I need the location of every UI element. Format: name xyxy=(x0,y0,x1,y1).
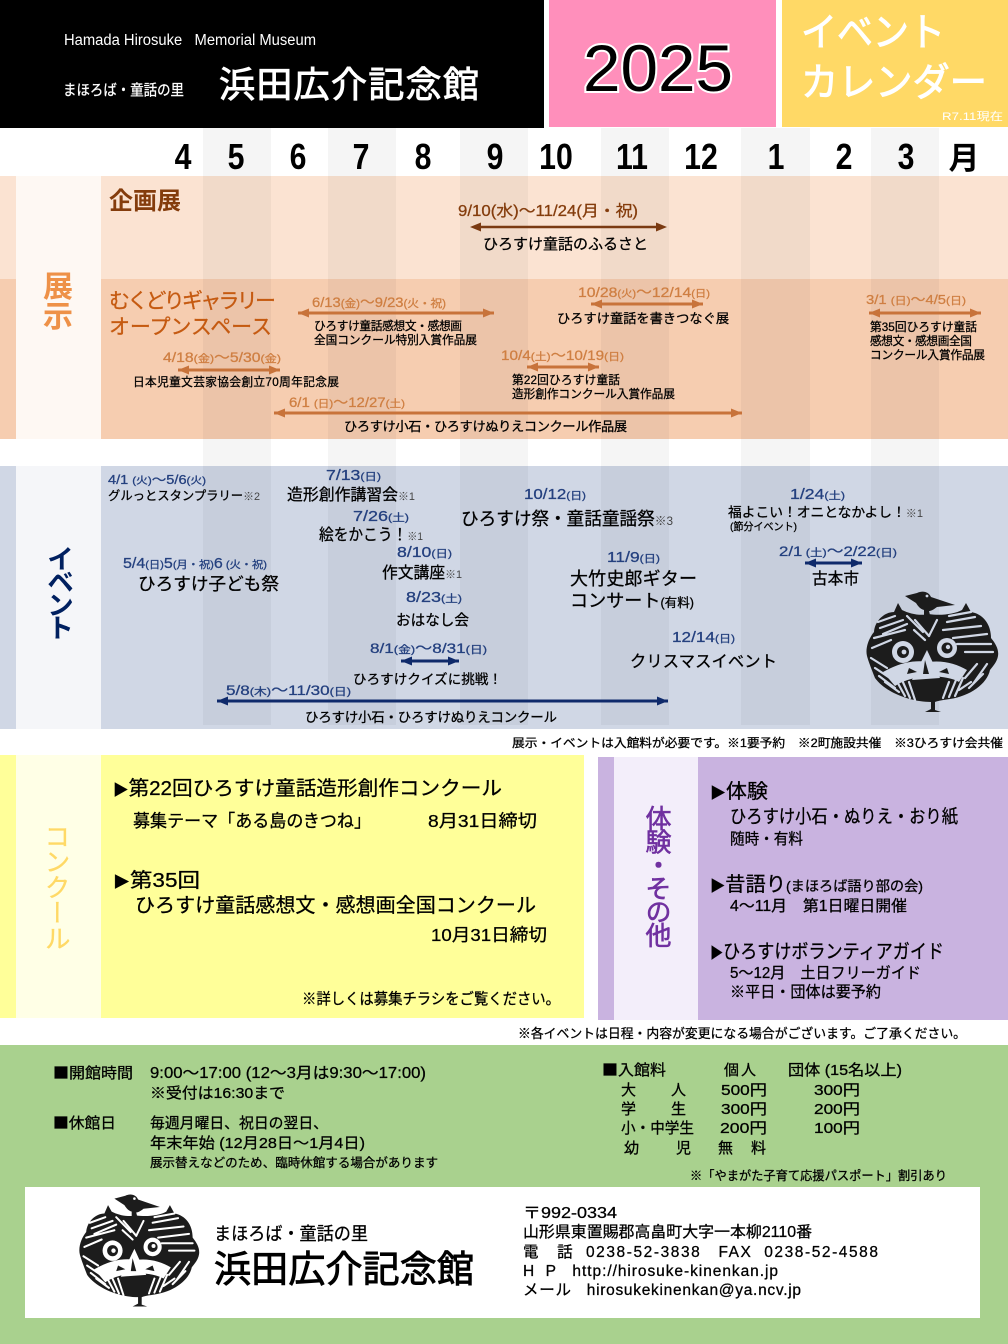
event: pebble contest: 5/8 (木) ～11/30 (日) xyxy=(226,682,351,698)
event: gallery 10/28: ひろすけ童話を書きつなぐ展 xyxy=(557,311,729,326)
header: year xyxy=(549,0,776,127)
event: stamp rally xyxy=(108,473,260,503)
admission table: 料 xyxy=(751,1140,766,1157)
event: gallery 10/4: 第22回ひろすけ童話 xyxy=(512,373,620,387)
event: gallery 6/13: ひろすけ童話感想文・感想画 xyxy=(314,319,462,333)
event: stamp rally: グルっとスタンプラリー※2 xyxy=(108,489,260,503)
event: drawing xyxy=(319,508,423,544)
event: gallery 10/4: 造形創作コンクール入賞作品展 xyxy=(512,387,675,401)
event: drawing: 絵をかこう！※1 xyxy=(319,526,423,544)
heading: gallery: むくどりギャラリー xyxy=(109,290,276,313)
month header row: 12 xyxy=(684,138,718,178)
event: guitar concert: 大竹史郎ギター xyxy=(570,569,697,589)
event: guitar concert xyxy=(570,549,697,611)
month header row: 11 xyxy=(616,138,648,178)
event: gallery 10/4 xyxy=(501,348,675,401)
event: guitar concert: 11/9 (日) xyxy=(607,549,660,566)
admission table: ■入館料 xyxy=(602,1059,666,1080)
event: special exhibition: ひろすけ童話のふるさと xyxy=(483,236,648,253)
panel: visitor information xyxy=(0,1045,1008,1344)
admission table: 500円 xyxy=(721,1082,767,1099)
admission table: 児 xyxy=(676,1140,691,1157)
event: composition: 作文講座※1 xyxy=(382,564,462,582)
event: quiz xyxy=(353,640,502,687)
panel: experience and others: ▶昔語り(まほろば語り部の会) xyxy=(710,873,923,896)
event: book market: 2/1 (土) ～2/22 (日) xyxy=(779,543,897,559)
panel: experience and others: ひろすけ小石・ぬりえ・おり紙 xyxy=(730,806,958,827)
event: setsubun: 1/24 (土) xyxy=(790,486,845,503)
heading: gallery xyxy=(109,290,276,339)
opening hours: ■開館時間 xyxy=(53,1062,133,1083)
opening hours: 9:00～17:00 (12～3月は9:30～17:00) xyxy=(150,1065,426,1082)
opening hours xyxy=(53,1062,426,1102)
event: children's festival: 5/4(日)5(月・祝)6 (火・祝) xyxy=(123,555,267,572)
event: gallery 4/18: 4/18 (金)～5/30 (金) xyxy=(163,350,281,365)
event: special exhibition: 9/10(水)～11/24(月・祝) xyxy=(458,202,638,220)
event: gallery 10/4: 10/4 (土)～10/19 (日) xyxy=(501,348,624,363)
panel: contests: ※詳しくは募集チラシをご覧ください。 xyxy=(302,991,560,1008)
event: christmas: クリスマスイベント xyxy=(630,653,777,671)
header: museum name: Hamada Hirosuke Memorial Museum xyxy=(64,32,316,49)
event: book market: 古本市 xyxy=(812,570,859,588)
month header row: 9 xyxy=(487,138,503,178)
panel: contests: 10月31日締切 xyxy=(431,925,547,945)
event: children's festival xyxy=(123,555,279,594)
month header row: 2 xyxy=(836,138,852,178)
panel: contact card: 山形県東置賜郡高畠町大字一本柳2110番 xyxy=(523,1223,812,1241)
event: gallery 3/1: コンクール入賞作品展 xyxy=(870,349,985,362)
header: museum name: 浜田広介記念館 xyxy=(219,64,479,105)
event: quiz: ひろすけクイズに挑戦！ xyxy=(353,672,502,687)
event: craft workshop: 造形創作講習会※1 xyxy=(287,486,415,504)
header: event calendar title: R7.11現在 xyxy=(942,110,1003,123)
panel: contests: 8月31日締切 xyxy=(428,811,537,831)
admission table: 100円 xyxy=(814,1120,860,1137)
event: guitar concert: コンサート(有料) xyxy=(570,591,694,611)
month header row: 7 xyxy=(353,138,369,178)
event: gallery 6/13 xyxy=(298,294,494,347)
admission table: 300円 xyxy=(721,1101,767,1118)
event: gallery 3/1: 感想文・感想画全国 xyxy=(870,334,972,348)
header: event calendar title: カレンダー xyxy=(801,62,987,105)
event: gallery 6/13: 6/13(金)～9/23(火・祝) xyxy=(312,294,446,310)
heading: exhibitions: 展 xyxy=(43,271,73,304)
month header row: 3 xyxy=(898,138,914,178)
event: setsubun: (節分イベント) xyxy=(730,520,797,533)
admission table: 学 xyxy=(621,1101,636,1118)
admission table: 200円 xyxy=(814,1101,860,1118)
panel: contests: コンクール xyxy=(41,823,71,951)
panel: contact card: 浜田広介記念館 xyxy=(214,1249,474,1290)
footnote: admission note: 展示・イベントは入館料が必要です。※1要予約 ※2町施設共催 ※3ひろすけ会共催 xyxy=(512,735,1003,750)
header: event calendar title xyxy=(782,0,1008,127)
month header row: 4 xyxy=(175,138,192,178)
event: quiz: 8/1 (金) ～8/31 (日) xyxy=(370,640,487,656)
panel: contests xyxy=(0,755,584,1018)
month header row: 10 xyxy=(539,138,573,178)
panel: experience and others: ▶ひろすけボランティアガイド xyxy=(710,941,944,963)
panel: experience and others: ※平日・団体は要予約 xyxy=(730,983,881,1001)
month header row xyxy=(175,138,980,178)
panel: experience and others xyxy=(598,757,1008,1020)
event: hirosuke festival xyxy=(461,486,673,529)
event: hirosuke festival: ひろすけ祭・童話童謡祭※3 xyxy=(461,509,673,529)
heading: events: イベント xyxy=(43,545,73,641)
month header row: 6 xyxy=(290,138,306,178)
panel: exhibitions xyxy=(0,176,1008,439)
opening hours: ※受付は16:30まで xyxy=(150,1085,285,1102)
panel: experience and others: 随時・有料 xyxy=(730,830,803,848)
event: gallery 3/1: 3/1 (日)～4/5 (日) xyxy=(866,292,966,307)
admission table: 幼 xyxy=(624,1140,639,1157)
month header row: 月 xyxy=(948,141,980,176)
event: hirosuke festival: 10/12 (日) xyxy=(524,486,586,503)
event: craft workshop: 7/13 (日) xyxy=(326,467,381,484)
panel: events xyxy=(0,466,1008,729)
panel: contact card: メール hirosukekinenkan@ya.ncv.jp xyxy=(523,1282,801,1299)
admission table: 生 xyxy=(671,1101,686,1118)
event: stamp rally: 4/1 (火)～5/6 (火) xyxy=(108,473,206,487)
event: gallery 10/28: 10/28 (火)～12/14 (日) xyxy=(578,284,710,300)
event: gallery 3/1: 第35回ひろすけ童話 xyxy=(870,320,977,334)
panel: contact card: 電 話 0238-52-3838 FAX 0238-52-4588 xyxy=(523,1243,878,1261)
event: storytelling: 8/23 (土) xyxy=(406,589,462,606)
panel: contests: ▶第35回 xyxy=(113,869,200,892)
panel: experience and others: 4～11月 第1日曜日開催 xyxy=(730,897,907,915)
panel: experience and others: 5～12月 土日フリーガイド xyxy=(730,964,921,982)
panel: contact card xyxy=(25,1187,980,1318)
admission table: 200円 xyxy=(720,1120,767,1137)
month header row: 1 xyxy=(768,138,784,178)
event: pebble contest xyxy=(217,682,668,725)
event: pebble contest: ひろすけ小石・ひろすけぬりえコンクール xyxy=(305,710,557,725)
panel: contact card: H P http://hirosuke-kinenkan.jp xyxy=(523,1263,778,1280)
footnote: schedule change note: ※各イベントは日程・内容が変更になる場合がございます。ご了承ください。 xyxy=(518,1026,966,1041)
panel: experience and others: ▶体験 xyxy=(710,780,768,803)
event: setsubun xyxy=(728,486,923,533)
panel: contests: ▶第22回ひろすけ童話造形創作コンクール xyxy=(113,777,502,800)
header: year: 2025 xyxy=(583,31,733,105)
header: event calendar title: イベント xyxy=(801,12,945,55)
event: gallery 4/18: 日本児童文芸家協会創立70周年記念展 xyxy=(133,375,339,389)
heading: gallery: オープンスペース xyxy=(109,316,272,339)
closed days: ■休館日 xyxy=(53,1112,116,1133)
icon: owl logo xyxy=(79,1194,199,1306)
panel: contact card: 〒992-0334 xyxy=(523,1205,617,1222)
closed days: 毎週月曜日、祝日の翌日、 xyxy=(150,1115,328,1132)
event: storytelling: おはなし会 xyxy=(396,612,469,629)
event: gallery 6/1: 6/1 (日)～12/27 (土) xyxy=(289,395,405,410)
event: gallery 6/1: ひろすけ小石・ひろすけぬりえコンクール作品展 xyxy=(344,419,627,434)
event: children's festival: ひろすけ子ども祭 xyxy=(138,574,279,594)
month header row: 8 xyxy=(415,138,431,178)
closed days xyxy=(53,1112,438,1170)
panel: contests: 募集テーマ「ある島のきつね」 xyxy=(133,811,371,831)
event: book market xyxy=(779,543,897,588)
event: christmas xyxy=(630,629,777,671)
closed days: 年末年始 (12月28日～1月4日) xyxy=(150,1135,365,1152)
admission table xyxy=(602,1059,947,1183)
event: christmas: 12/14 (日) xyxy=(672,629,735,646)
event: drawing: 7/26 (土) xyxy=(353,508,409,525)
event: gallery 4/18 xyxy=(133,350,339,389)
event: gallery 6/1 xyxy=(274,395,742,434)
closed days: 展示替えなどのため、臨時休館する場合があります xyxy=(150,1155,438,1170)
admission table: 個人 xyxy=(724,1062,756,1079)
admission table: 団体 (15名以上) xyxy=(788,1062,902,1079)
header: museum name: まほろば・童話の里 xyxy=(63,82,184,99)
admission table: ※「やまがた子育て応援パスポート」割引あり xyxy=(690,1168,947,1183)
event: special exhibition xyxy=(458,202,667,253)
month header row: 5 xyxy=(228,138,244,178)
event: craft workshop xyxy=(287,467,415,504)
event: setsubun: 福よこい！オニとなかよし！※1 xyxy=(728,505,923,520)
heading: special exhibition: 企画展 xyxy=(109,188,181,215)
admission table: 大 xyxy=(621,1082,636,1099)
event: composition xyxy=(382,544,462,582)
heading: exhibitions second glyph: 示 xyxy=(43,301,73,334)
event: storytelling xyxy=(396,589,469,629)
event: gallery 3/1 xyxy=(866,292,985,362)
header: museum name xyxy=(0,0,544,128)
panel: contact card: まほろば・童話の里 xyxy=(214,1224,368,1244)
event: gallery 10/28 xyxy=(557,284,729,326)
panel: experience and others: 体験・その他 xyxy=(642,805,672,948)
admission table: 無 xyxy=(718,1140,733,1157)
event: gallery 6/13: 全国コンクール特別入賞作品展 xyxy=(314,333,477,347)
admission table: 小・中学生 xyxy=(621,1120,694,1137)
icon: owl woodcut mascot xyxy=(866,592,998,712)
panel: contests: ひろすけ童話感想文・感想画全国コンクール xyxy=(135,894,536,917)
event: composition: 8/10 (日) xyxy=(397,544,452,561)
admission table: 300円 xyxy=(814,1082,860,1099)
admission table: 人 xyxy=(671,1082,686,1099)
